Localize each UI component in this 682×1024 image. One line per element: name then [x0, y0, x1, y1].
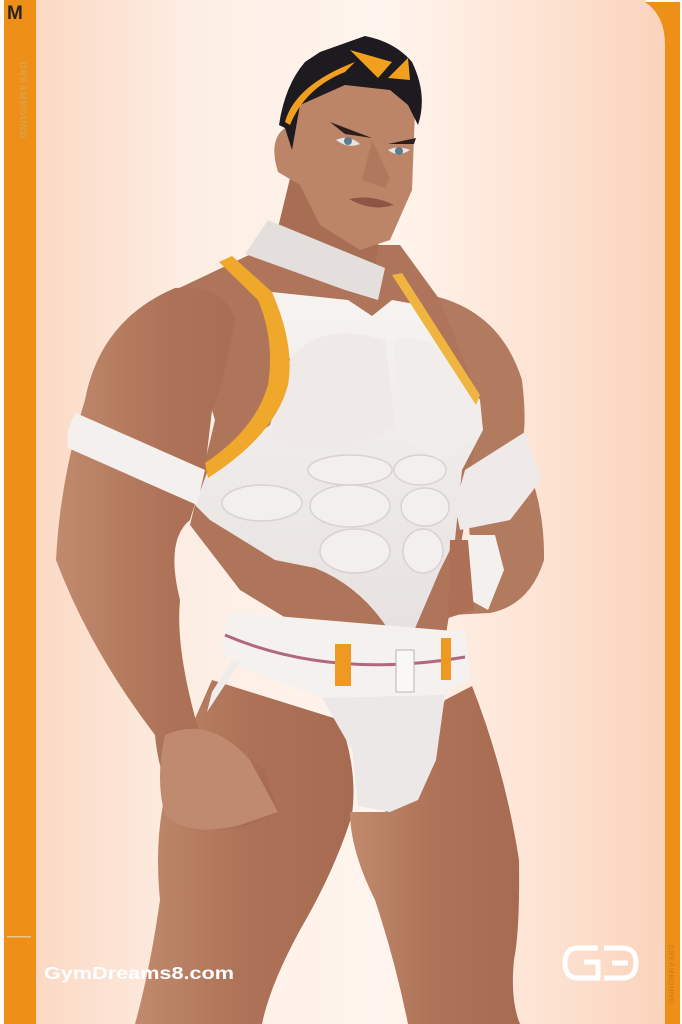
legs	[135, 680, 520, 1024]
right arm band	[455, 432, 541, 530]
vertical band label: DREAMBOUND	[18, 62, 28, 138]
hair	[279, 36, 422, 150]
abdominal panels	[222, 455, 449, 573]
website caption: GymDreams8.com	[44, 963, 234, 983]
wrist wrap	[462, 535, 504, 610]
left fist	[160, 729, 278, 830]
nose	[362, 140, 390, 188]
eyebrows	[330, 122, 416, 144]
white vest	[195, 292, 483, 650]
torso skin	[175, 245, 480, 645]
collar	[245, 220, 385, 300]
right hand	[448, 540, 474, 618]
waist belt	[221, 612, 471, 700]
figure	[56, 36, 544, 1024]
side strap	[207, 660, 240, 712]
left arm	[56, 288, 278, 830]
neck	[275, 170, 385, 270]
GD logo	[565, 948, 636, 978]
chest shading	[270, 333, 395, 450]
left arm band	[67, 413, 205, 505]
white brief	[322, 695, 445, 812]
belt buckle tabs	[335, 644, 351, 686]
corner logo letter: M	[7, 3, 23, 24]
eyes	[336, 138, 410, 154]
right-side arm	[430, 295, 544, 615]
orange strap left	[205, 256, 290, 478]
left orange band	[4, 0, 36, 1024]
right band fine print: DREAMBOUND	[667, 945, 674, 1003]
orange strap right	[392, 273, 480, 405]
head	[274, 36, 422, 250]
mouth	[349, 197, 394, 207]
hair stripes	[285, 50, 410, 125]
right orange band	[645, 2, 680, 1024]
